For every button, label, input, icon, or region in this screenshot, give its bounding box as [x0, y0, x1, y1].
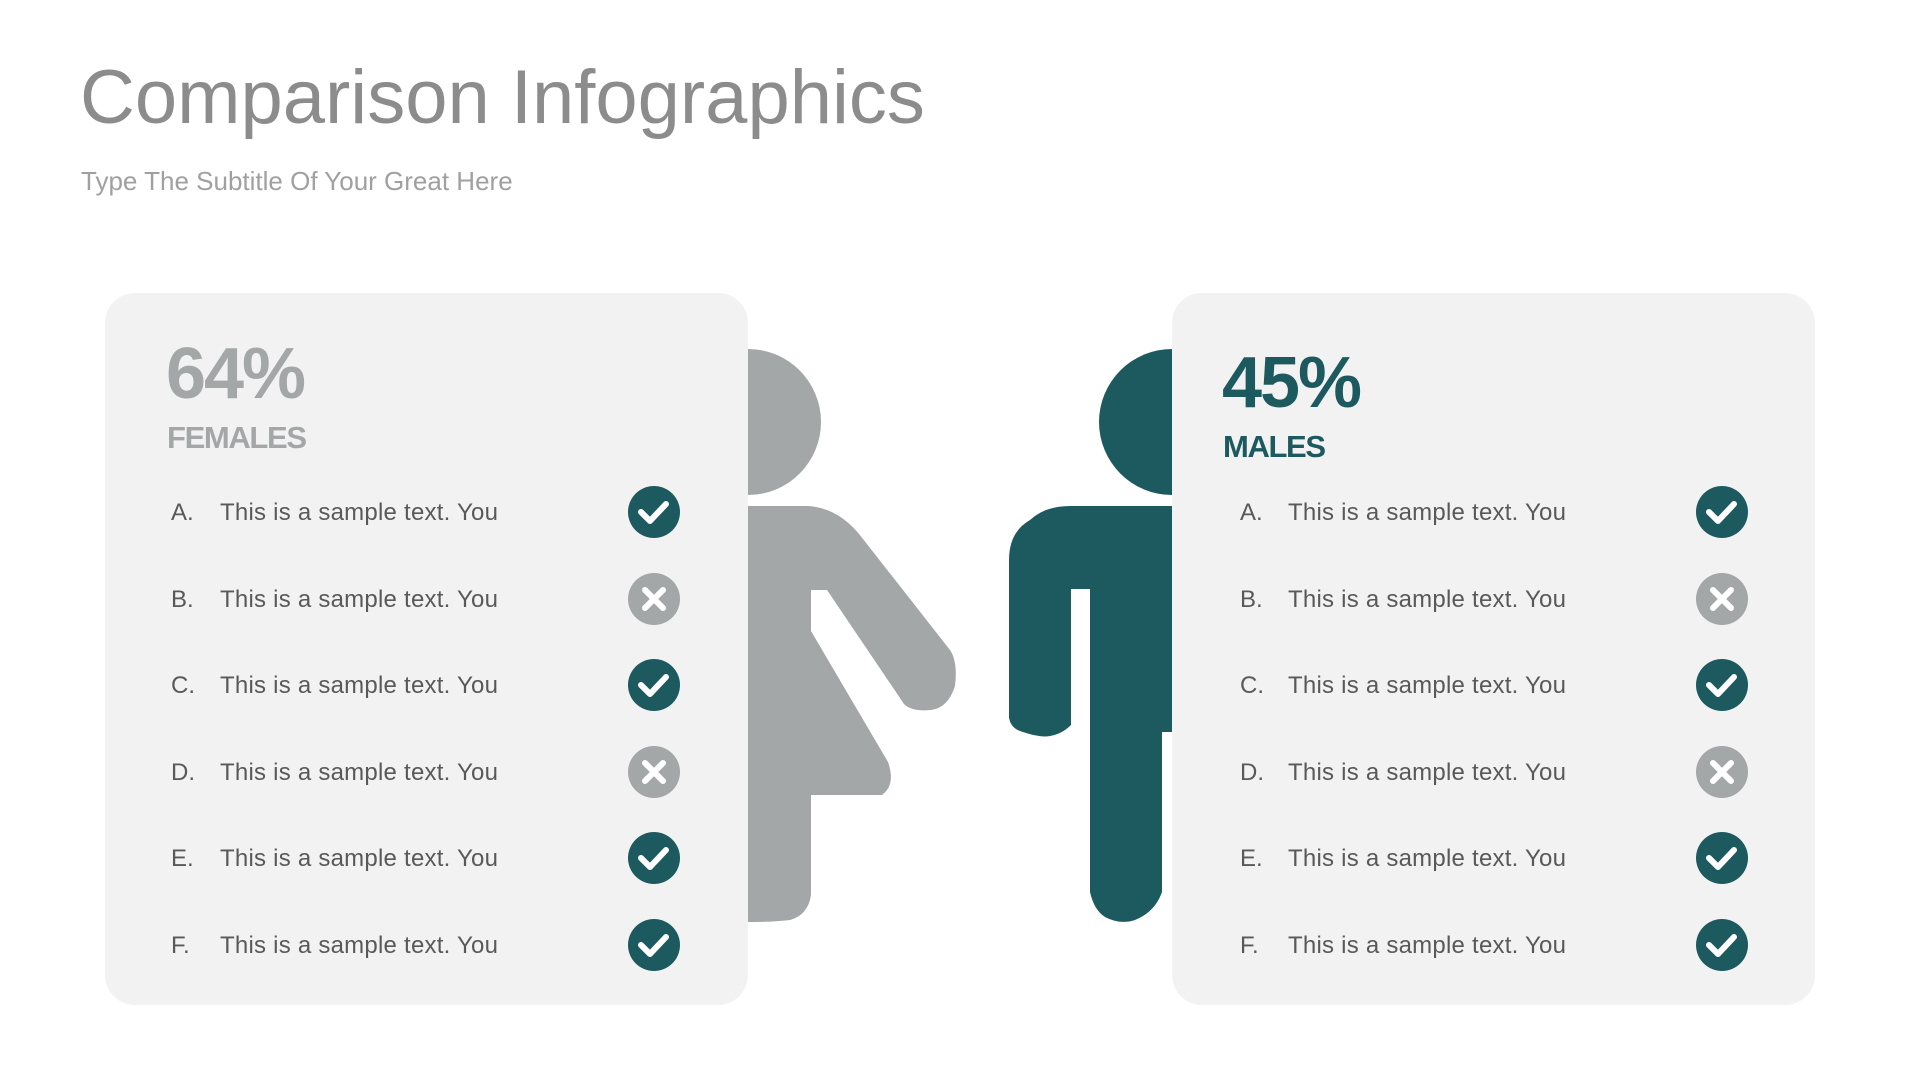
list: female items: B.: [171, 586, 194, 613]
list: male items: C.: [1240, 672, 1264, 699]
list: female items: A.: [171, 499, 194, 526]
subtitle: Type The Subtitle Of Your Great Here: [81, 166, 513, 196]
list: male items: F.: [1240, 932, 1259, 959]
list: male items: A.: [1240, 499, 1263, 526]
list: female items: C.: [171, 672, 195, 699]
list: female items: This is a sample text. You: [220, 499, 498, 526]
list: male items: This is a sample text. You: [1288, 499, 1566, 526]
list: male items: This is a sample text. You: [1288, 586, 1566, 613]
figure: male: [1009, 349, 1245, 922]
list: male items: This is a sample text. You: [1288, 759, 1566, 786]
label: MALES: MALES: [1223, 429, 1326, 464]
list: female items: E.: [171, 845, 194, 872]
panel: females: [105, 293, 748, 1005]
list: female items: This is a sample text. You: [220, 759, 498, 786]
list: female items: This is a sample text. You: [220, 932, 498, 959]
list: female items: This is a sample text. You: [220, 672, 498, 699]
list: male items: This is a sample text. You: [1288, 932, 1566, 959]
icons: male checks/crosses: [1696, 486, 1748, 971]
list: male items: This is a sample text. You: [1288, 672, 1566, 699]
panel: males: [1172, 293, 1815, 1005]
figure: female: [675, 349, 956, 922]
list: male items: B.: [1240, 586, 1263, 613]
list: female items: This is a sample text. You: [220, 845, 498, 872]
list: male items: [1240, 499, 1566, 959]
icons: female checks/crosses: [628, 486, 680, 971]
list: male items: D.: [1240, 759, 1264, 786]
list: female items: F.: [171, 932, 190, 959]
stat: 45%: 45%: [1222, 343, 1362, 423]
list: female items: This is a sample text. You: [220, 586, 498, 613]
list: male items: This is a sample text. You: [1288, 845, 1566, 872]
title: Comparison Infographics: [80, 55, 925, 140]
stat: 64%: 64%: [166, 334, 306, 414]
list: female items: D.: [171, 759, 195, 786]
list: female items: [171, 499, 498, 959]
label: FEMALES: FEMALES: [167, 420, 307, 455]
list: male items: E.: [1240, 845, 1263, 872]
